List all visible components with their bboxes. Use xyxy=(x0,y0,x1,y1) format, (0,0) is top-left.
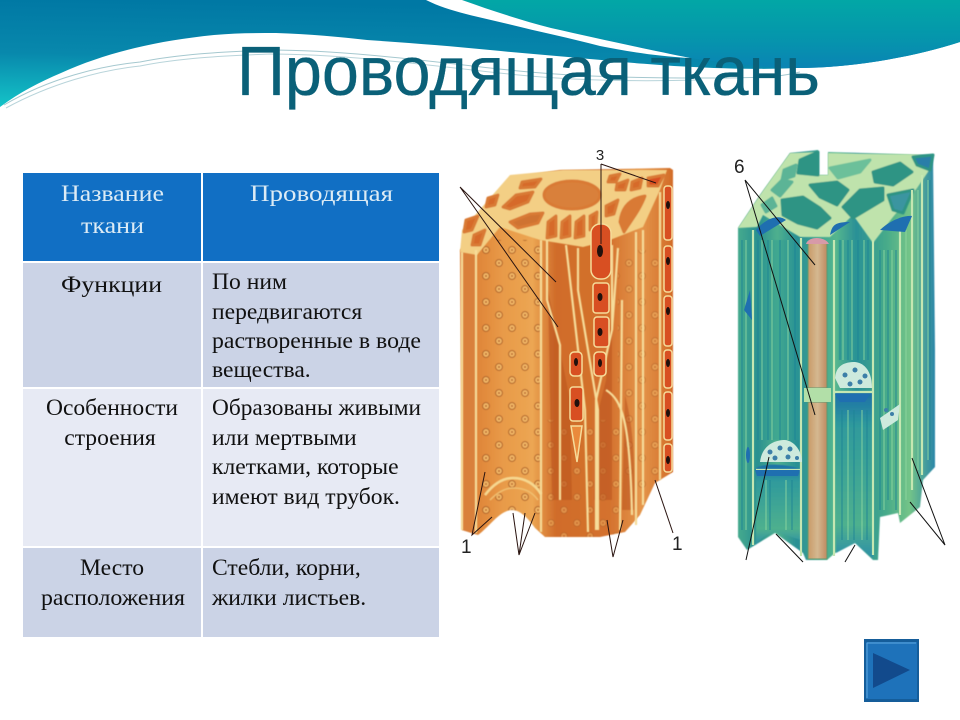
table row: structure: имеют вид трубок. xyxy=(212,484,400,510)
table row: structure: Образованы живыми xyxy=(212,395,421,421)
table row: structure xyxy=(23,389,439,546)
orange labels: 1 xyxy=(461,537,472,558)
orange vertical fibre walls xyxy=(462,192,660,533)
orange cell nuclei xyxy=(574,201,670,464)
navigation button: next xyxy=(864,639,919,702)
orange red living cells xyxy=(570,186,672,472)
table: conducting tissue summary xyxy=(23,173,439,637)
illustration: orange xylem block xyxy=(460,147,683,558)
table row: functions xyxy=(23,263,439,387)
table row: functions: растворенные в воде xyxy=(212,328,421,354)
table row: structure: Особенности xyxy=(46,395,178,421)
table row: location: жилки листьев. xyxy=(211,585,366,611)
illustration: green phloem block xyxy=(734,150,945,562)
orange top surface xyxy=(460,170,667,255)
green block body xyxy=(738,150,935,560)
table row: structure: или мертвыми xyxy=(212,425,357,451)
table row: structure: клетками, которые xyxy=(212,454,399,480)
table row: location: Место xyxy=(80,555,144,581)
table row: structure: строения xyxy=(64,425,156,451)
green fine stripes xyxy=(742,180,930,540)
table row: functions: Функции xyxy=(61,272,162,298)
green leader lines xyxy=(745,180,945,562)
table row: location xyxy=(23,548,439,637)
green sieve plates xyxy=(760,362,900,462)
table row: functions: передвигаются xyxy=(212,299,362,325)
green top surface xyxy=(738,152,933,243)
table row: location: расположения xyxy=(41,585,185,611)
green blue shaded notches xyxy=(744,216,912,476)
green central brown sieve tubes xyxy=(804,238,831,559)
orange leader lines xyxy=(460,164,673,557)
table header row: Проводящая xyxy=(250,181,393,207)
title: Проводящая ткань xyxy=(237,32,820,110)
table header row xyxy=(23,173,439,261)
illustration: orange xylem block: 3 xyxy=(596,147,604,164)
table header row: ткани xyxy=(81,213,144,239)
background: top wave decoration xyxy=(0,0,960,108)
table row: location: Стебли, корни, xyxy=(212,555,361,581)
table row: functions: По ним xyxy=(212,269,287,295)
illustration: orange xylem block: 1 xyxy=(672,534,683,555)
orange block body xyxy=(460,168,673,540)
table header row: Название xyxy=(61,181,164,207)
table row: functions: вещества. xyxy=(212,357,311,383)
green label: 6 xyxy=(734,157,745,178)
green cell walls xyxy=(753,175,922,556)
